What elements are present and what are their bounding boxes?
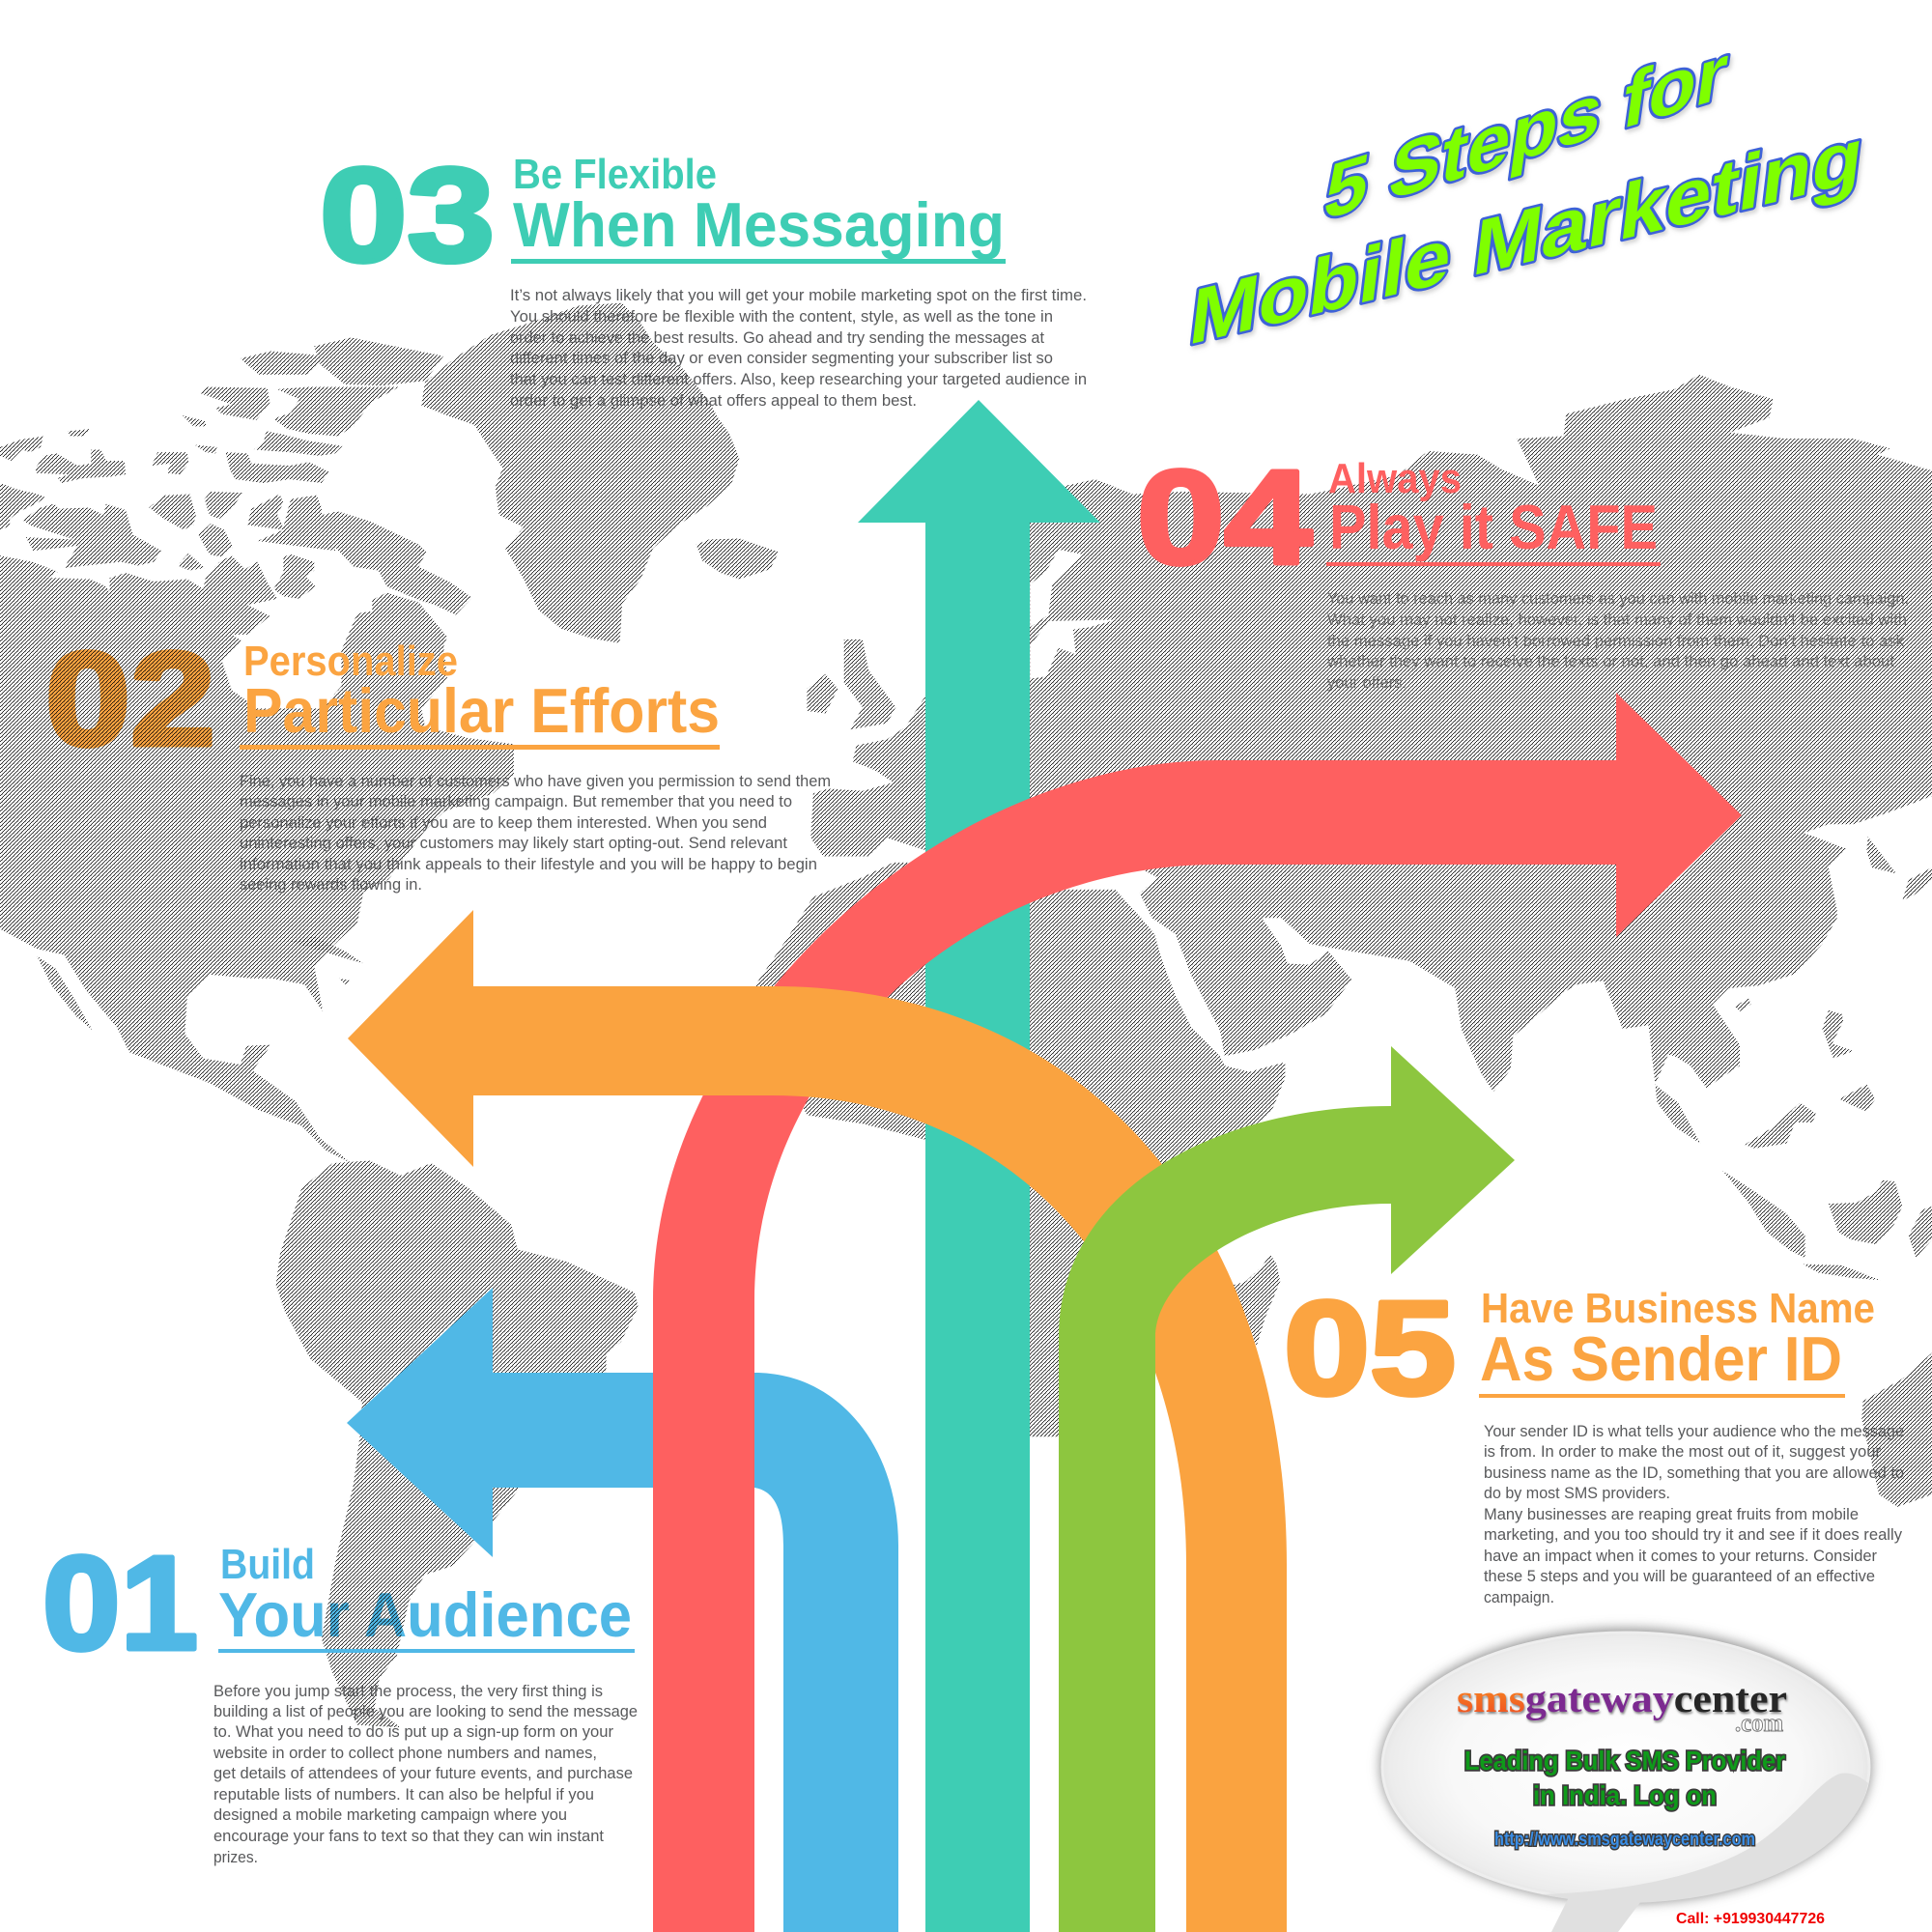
body text: encourage your fans to text so that they can win instant	[213, 1828, 604, 1845]
heading line 2: When Messaging	[513, 189, 1005, 260]
body text: different times of the day or even consider segmenting your subscriber list so	[510, 350, 1053, 367]
tagline line 2: in India. Log on	[1533, 1780, 1717, 1810]
Eurasia	[810, 375, 1932, 1144]
Iceland	[696, 538, 779, 579]
step 02	[240, 638, 831, 894]
body text: to. What you need to do is put up a sign-up form on your	[213, 1723, 614, 1741]
Australia	[1861, 1352, 1932, 1507]
body text: these 5 steps and you will be guaranteed of an effective	[1484, 1568, 1875, 1585]
heading line 1: Always	[1328, 455, 1462, 502]
number 04: 04	[1137, 443, 1312, 592]
arrow 01: blue	[347, 1288, 898, 1932]
world map	[0, 303, 1932, 1727]
speech bubble advert	[1380, 1629, 1871, 1932]
body text: order to get a glimpse of what offers appeal to them best.	[510, 392, 917, 410]
body text	[213, 1683, 638, 1866]
bubble tail	[1551, 1893, 1647, 1932]
heading line 2: Play it SAFE	[1329, 492, 1658, 562]
body text: uninteresting offers, your customers may likely start opting-out. Send relevant	[240, 835, 787, 852]
body text: get details of attendees of your future events, and purchase	[213, 1765, 633, 1782]
arrow 03: teal	[858, 400, 1100, 1932]
body text: campaign.	[1484, 1589, 1554, 1606]
body text: personalize your efforts if you are to keep them interested. When you send	[240, 814, 767, 832]
heading: Your Audience: Your Audience	[218, 1579, 632, 1650]
underline	[218, 1649, 635, 1653]
South America	[276, 1161, 639, 1727]
heading line 1: Personalize	[243, 638, 458, 685]
title	[1185, 26, 1868, 362]
body text: designed a mobile marketing campaign where you	[213, 1806, 567, 1824]
North America	[0, 555, 514, 1163]
title line 2: Mobile Marketing	[1185, 109, 1868, 362]
body text	[240, 773, 831, 894]
body text: Many businesses are reaping great fruits from mobile	[1484, 1506, 1859, 1523]
bubble shadow	[1380, 1629, 1871, 1903]
step 05	[1284, 1274, 1904, 1606]
body text: business name as the ID, something that you are allowed to	[1484, 1464, 1904, 1482]
body text: information that you think appeals to their lifestyle and you will be happy to begin	[240, 856, 817, 873]
logo .com: .com	[1735, 1709, 1783, 1737]
body text	[510, 287, 1087, 410]
body text: the message if you haven’t borrowed permission from them. Don’t hesitate to ask	[1327, 633, 1905, 650]
heading line 2: Particular Efforts	[243, 675, 720, 746]
tagline line 1: Leading Bulk SMS Provider	[1464, 1746, 1785, 1776]
Greenland	[421, 303, 739, 643]
step 04	[1137, 443, 1909, 692]
number 03: 03	[320, 141, 495, 290]
body text: It’s not always likely that you will get your mobile marketing spot on the first time.	[510, 287, 1087, 304]
body text: building a list of people you are looking to send the message	[213, 1703, 638, 1720]
Africa	[752, 863, 1285, 1436]
call text: Call: +919930447726	[1676, 1911, 1825, 1927]
heading line 1: Have Business Name	[1481, 1285, 1875, 1332]
body text: Your sender ID is what tells your audience who the message	[1484, 1423, 1904, 1440]
body text: Before you jump start the process, the very first thing is	[213, 1683, 603, 1700]
arrow 05: green	[1059, 1046, 1515, 1932]
arrow 04: red	[653, 693, 1742, 1932]
body text	[1484, 1423, 1904, 1606]
body text: reputable lists of numbers. It can also be helpful if you	[213, 1786, 594, 1804]
Madagascar	[1234, 1254, 1280, 1346]
title line 1: 5 Steps for	[1320, 26, 1733, 238]
arrow 02: orange	[348, 910, 1287, 1932]
body text: seeing rewards flowing in.	[240, 876, 422, 894]
body text: You should therefore be flexible with the content, style, as well as the tone in	[510, 308, 1053, 326]
body text: website in order to collect phone numbers and names,	[213, 1745, 597, 1762]
heading line 1: Build	[220, 1541, 315, 1588]
body text: do by most SMS providers.	[1484, 1485, 1670, 1502]
Canadian arctic islands	[0, 337, 472, 1030]
bubble body	[1382, 1633, 1869, 1901]
number 05: 05	[1284, 1274, 1456, 1423]
step 03	[320, 141, 1087, 410]
body text: that you can test different offers. Also, keep researching your targeted audience in	[510, 371, 1087, 388]
number 02: 02	[45, 625, 215, 774]
East Asian and Pacific islands	[1722, 837, 1932, 1280]
underline	[240, 745, 720, 750]
website url: http://www.smsgatewaycenter.com	[1494, 1830, 1755, 1850]
body text: is from. In order to make the most out of it, suggest your	[1484, 1443, 1882, 1461]
step 01	[43, 1529, 638, 1866]
body text: your offers.	[1327, 674, 1406, 692]
body text: order to achieve the best results. Go ahead and try sending the messages at	[510, 329, 1044, 347]
body text: whether they want to receive the texts or not, and then go ahead and text about	[1326, 653, 1894, 670]
body text: messages in your mobile marketing campaign. But remember that you need to	[240, 793, 792, 810]
body text	[1326, 590, 1909, 692]
heading line 1: Be Flexible	[513, 151, 717, 198]
heading line 2: As Sender ID	[1480, 1323, 1842, 1394]
body text: prizes.	[213, 1849, 258, 1866]
body text: You want to reach as many customers as you can with mobile marketing campaign.	[1327, 590, 1909, 608]
number 01: 01	[43, 1529, 198, 1678]
underline	[511, 259, 1006, 264]
body text: What you may not realize, however, is that many of them wouldn’t be excited with	[1327, 611, 1907, 629]
body text: have an impact when it comes to your returns. Consider	[1484, 1548, 1878, 1565]
underline	[1326, 562, 1661, 566]
body text: Fine, you have a number of customers who have given you permission to send them	[240, 773, 831, 790]
body text: marketing, and you too should try it and see if it does really	[1484, 1526, 1903, 1544]
logo wordmark: smsgateway center	[1457, 1676, 1787, 1720]
Baltic sea gaps	[1030, 550, 1117, 679]
British Isles	[807, 639, 895, 729]
bubble swoosh	[1541, 1773, 1868, 1903]
underline	[1479, 1394, 1845, 1398]
